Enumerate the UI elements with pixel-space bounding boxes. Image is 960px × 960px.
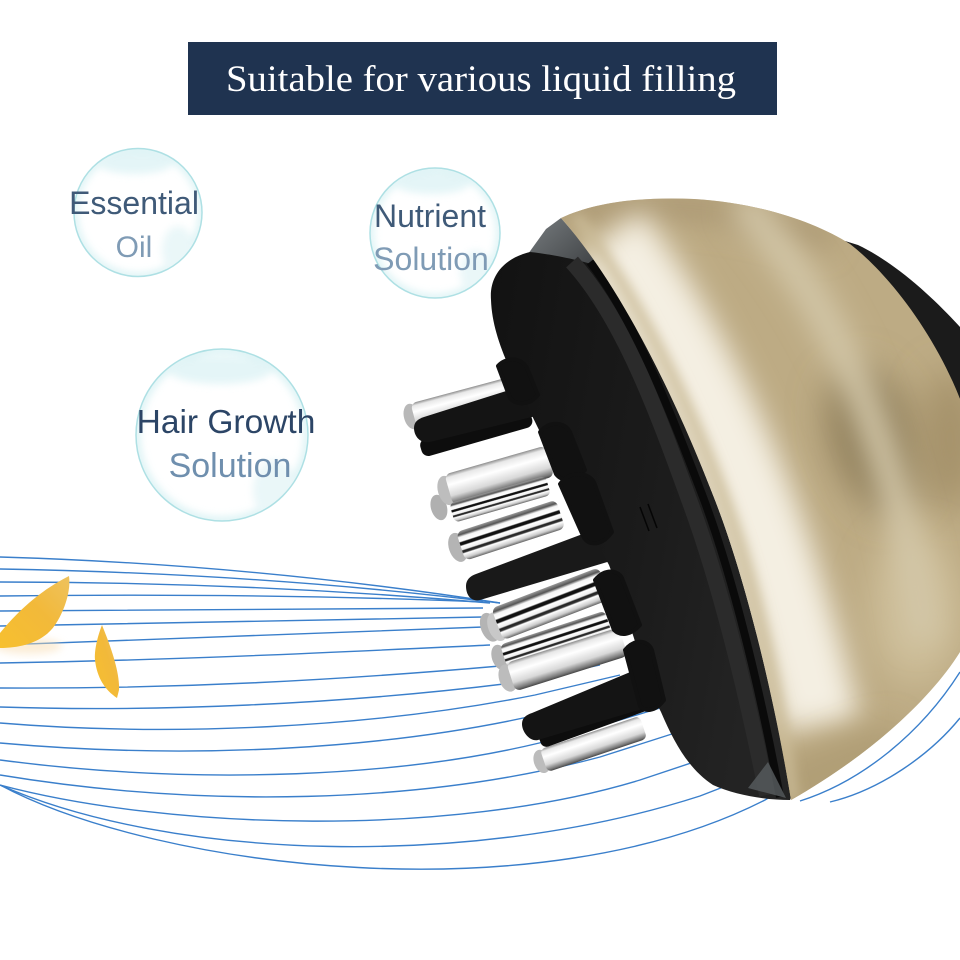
- bubble: hair growth solution: [136, 349, 315, 521]
- bubble: essential oil: [69, 148, 202, 276]
- bubble: nutrient solution: [370, 168, 500, 298]
- black disc base: [491, 252, 791, 800]
- flowing blue hair lines: [0, 557, 960, 869]
- bubble: hair growth solution: Solution: [169, 447, 291, 485]
- gold shell: [561, 198, 960, 800]
- bubble: essential oil: Essential: [69, 185, 199, 221]
- bubble: essential oil: Oil: [116, 231, 152, 264]
- product: scalp applicator: [401, 180, 960, 820]
- icon: golden leaves: [0, 576, 119, 698]
- chrome and black comb pins: [401, 376, 656, 775]
- bubble: hair growth solution: Hair Growth: [137, 404, 315, 441]
- title banner: Suitable for various liquid filling: [226, 59, 736, 100]
- translucent lower rim: [748, 762, 786, 798]
- bubble: nutrient solution: Solution: [373, 241, 489, 277]
- bubble: nutrient solution: Nutrient: [374, 198, 486, 234]
- black rear band: [845, 241, 960, 405]
- title banner: [188, 42, 777, 115]
- translucent upper rim: [528, 218, 618, 295]
